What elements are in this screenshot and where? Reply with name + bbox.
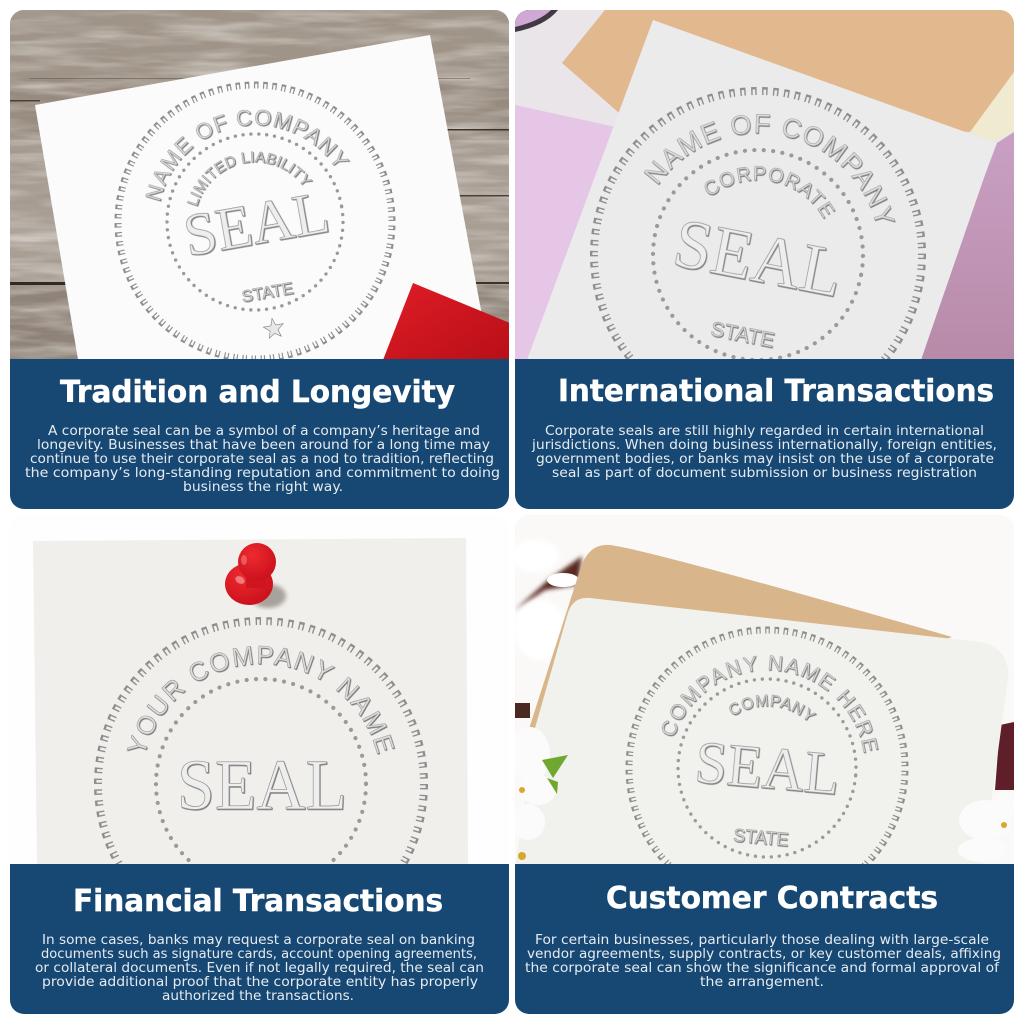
body text: business the right way. [183, 480, 343, 495]
seal text: SEAL: SEAL [668, 205, 849, 313]
seal text: name of company: NAME OF COMPANY [644, 114, 896, 223]
seal text: company name here: COMPANY NAME HERE [662, 655, 879, 754]
photo: wood table background [10, 10, 510, 360]
embossed seal [114, 82, 396, 359]
heading: Financial Transactions [73, 884, 443, 919]
kraft envelope [530, 544, 952, 728]
photo: white background [10, 515, 509, 865]
body text [35, 933, 484, 1004]
panel: financial transactions [10, 538, 509, 1014]
panel: tradition and longevity [10, 10, 509, 509]
paper sheet [527, 20, 996, 360]
photo: blossom background [515, 552, 1014, 790]
body text [25, 424, 500, 495]
seal text: name of company: NAME OF COMPANY [145, 110, 350, 202]
seal text: state: STATE [240, 279, 295, 306]
body text: In some cases, banks may request a corporate seal on banking [42, 933, 475, 948]
caption band [10, 359, 509, 509]
body text [531, 424, 997, 481]
seal text: SEAL: SEAL [177, 745, 347, 825]
seal text: limited liability: LIMITED LIABILITY [187, 151, 314, 207]
seal text: state: STATE [732, 825, 789, 850]
icon: red push pin [225, 543, 286, 608]
body text: seal as part of document submission or business registration [552, 466, 977, 481]
body text: For certain businesses, particularly those dealing with large-scale [535, 933, 989, 948]
photo: desk background [515, 10, 1014, 360]
paper card [515, 598, 1008, 870]
panel: international transactions [515, 10, 1014, 509]
icon: red block [383, 283, 510, 360]
body text [525, 933, 1001, 990]
icon: star [262, 317, 285, 339]
seal text: SEAL: SEAL [692, 729, 843, 807]
panel: customer contracts [515, 544, 1014, 1014]
body text: longevity. Businesses that have been around for a long time may [37, 438, 490, 453]
body text: jurisdictions. When doing business internationally, foreign entities, [531, 438, 997, 453]
body text: the company’s long-standing reputation and commitment to doing [25, 466, 500, 481]
seal text: corporate: CORPORATE [704, 166, 836, 220]
body text: vendor agreements, supply contracts, or key customer deals, affixing [527, 947, 1001, 962]
icon: blossoms left [518, 727, 568, 860]
body text: provide additional proof that the corporate entity has properly [42, 975, 478, 990]
embossed seal [94, 617, 428, 864]
paper sheet [33, 538, 468, 865]
body text: the corporate seal can show the significance and formal approval of [525, 961, 999, 976]
heading: Tradition and Longevity [60, 375, 455, 410]
body text: documents such as signature cards, account opening agreements, [41, 947, 477, 962]
body text: authorized the transactions. [162, 989, 354, 1004]
body text: continue to use their corporate seal as a nod to tradition, reflecting [30, 452, 494, 467]
caption band [515, 864, 1014, 1014]
paper sheet [35, 35, 482, 359]
heading: International Transactions [558, 374, 994, 409]
seal text: SEAL: SEAL [179, 179, 334, 269]
embossed seal [590, 87, 926, 359]
seal text: your company name: YOUR COMPANY NAME [126, 646, 396, 755]
seal text: state: STATE [709, 318, 776, 352]
body text: the arrangement. [700, 975, 824, 990]
body text: A corporate seal can be a symbol of a company’s heritage and [48, 424, 480, 439]
body text: Corporate seals are still highly regarded in certain international [545, 424, 984, 439]
body text: government bodies, or banks may insist on the use of a corporate [536, 452, 994, 467]
body text: or collateral documents. Even if not legally required, the seal can [35, 961, 484, 976]
seal text: company: COMPANY [729, 694, 818, 722]
heading: Customer Contracts [606, 881, 938, 916]
icon: blossoms right [958, 800, 1007, 862]
caption band [10, 864, 509, 1014]
caption band [515, 359, 1014, 509]
embossed seal [626, 626, 908, 864]
